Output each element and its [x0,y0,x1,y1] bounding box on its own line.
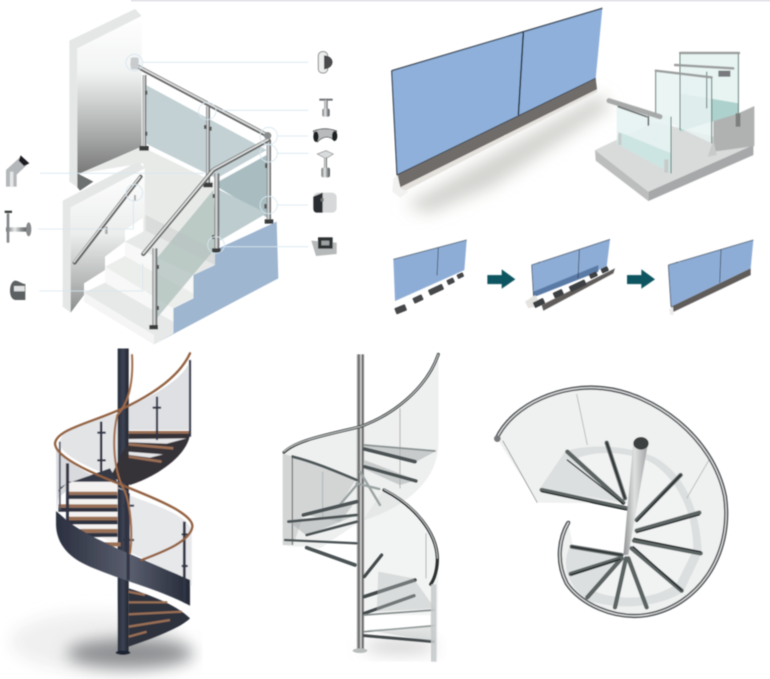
top edge line [131,0,770,2]
middle curved glass [56,445,129,512]
chrome handrail [284,354,438,584]
wall bracket [131,57,139,69]
upper curved glass [283,355,438,548]
glass left upper [58,413,118,477]
upper wall [69,9,142,191]
arrow [487,269,515,289]
stair side in blue [154,222,278,344]
handrails [74,63,268,263]
handrail end cap [494,435,501,442]
glass joints [292,408,426,578]
lower curved glass [364,490,438,662]
icon: T saddle support [319,99,333,117]
icon: wall bracket arm [5,211,31,243]
treads upper [285,445,435,565]
floor shadow [67,638,193,668]
panel: dark spiral staircase with timber handrail [10,348,193,672]
icon: 45 degree elbow [6,155,29,187]
central dark column [118,348,129,653]
icon: glass clamp [313,193,337,213]
landing floor [80,147,217,267]
glass edges [656,53,738,173]
lower curved glass [129,495,192,587]
white opening [537,503,627,555]
light gaps between upper treads [129,438,187,458]
aluminium base channel [392,78,597,198]
panel: top view of spiral staircase [494,388,726,616]
column top cap [633,437,649,450]
upper treads [90,432,189,482]
post base plates [139,146,273,329]
tread arms [542,443,701,607]
floor shadow [363,640,437,653]
inner tread glass ring [540,446,702,606]
lower tread glass [367,572,435,642]
mid treads [58,468,121,546]
main steel stringer band [56,511,190,606]
concrete slab [595,106,754,201]
step 3: finished balustrade [668,240,753,315]
lower wall [63,162,145,313]
timber handrail [55,353,192,560]
icon: elbow joint [313,129,337,142]
floor glow [10,612,183,672]
central steel column [357,354,364,651]
glass panels [146,85,268,318]
top handrails [609,53,739,125]
rear rail bracket [718,71,730,77]
large blue glass panes [392,8,602,175]
inner tread glass cutout [577,453,693,598]
steps [84,215,215,344]
icon: wall flange [318,52,332,73]
column foot [116,651,130,655]
railing standoffs and posts [59,360,191,602]
rear glass panels [617,53,738,173]
outer chrome handrail [497,388,726,616]
base shoe feet [618,113,740,173]
glass clamps [145,91,267,310]
panel: frameless glass balustrade [392,8,754,315]
leader lines [38,54,308,291]
column foot [353,648,367,653]
tread glass plates upper [287,444,436,536]
glass panel joints [503,394,710,503]
treads lower [364,555,434,642]
rail corner knuckle [264,132,271,139]
lower edge post [431,584,436,662]
icon: base plate holder [311,237,337,256]
upper tread underside [110,433,190,485]
step 2: glass set in channel [525,239,615,311]
ground shadow [405,95,612,213]
panel: chrome and glass spiral staircase [283,354,438,662]
upper curved glass [129,362,190,430]
panel: stair railing with fittings diagram [5,9,337,344]
arrow [627,269,655,289]
step 1: panes with separate clips [393,240,467,315]
outer glass disc [497,388,726,616]
icon: end cap [10,281,25,300]
central tapered column [623,442,648,555]
lower treads and underside [129,588,190,647]
icon: adjustable saddle [317,151,333,177]
glass posts [105,75,271,327]
left dark glass section [283,453,357,545]
